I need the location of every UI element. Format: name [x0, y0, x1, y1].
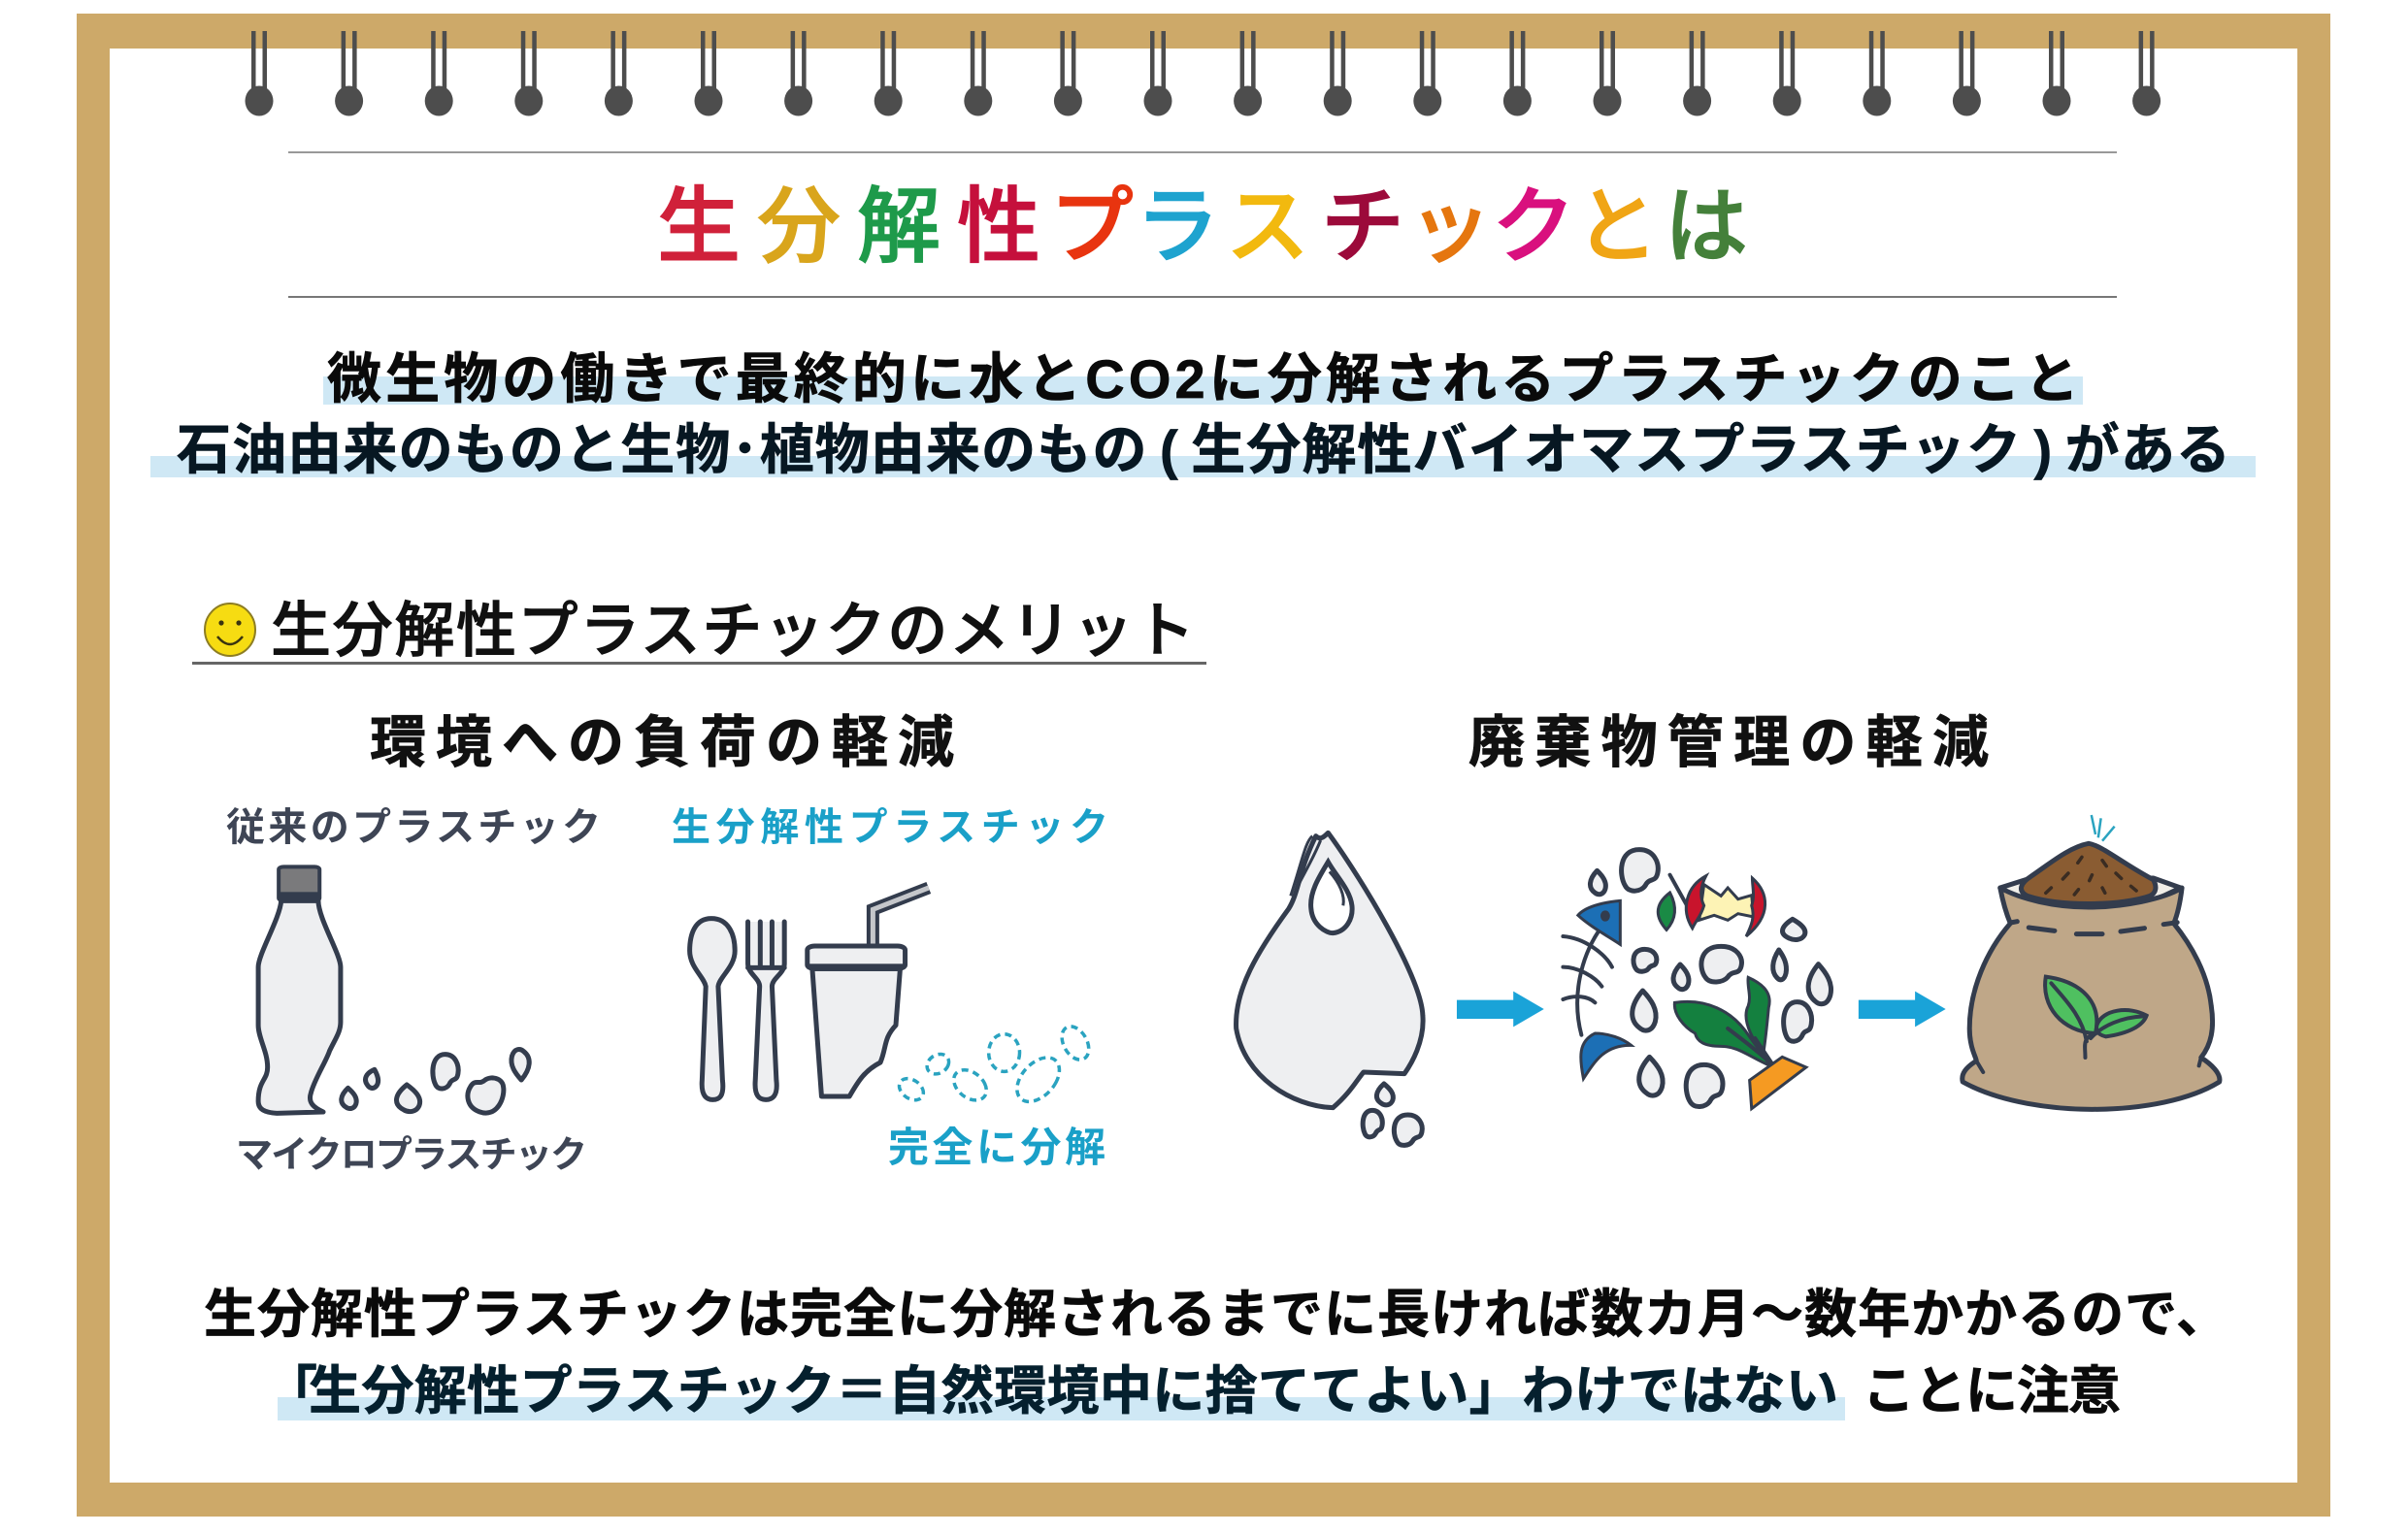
title: ッ — [1408, 180, 1492, 274]
plastic fragments — [1590, 850, 1831, 1107]
definition text block — [150, 348, 2256, 480]
decomposed fragments (dashed) — [895, 1026, 1093, 1104]
subheading: waste management: 廃棄物管理の軽減 — [1468, 711, 1989, 774]
apple core — [1658, 875, 1765, 936]
closing note — [204, 1286, 2228, 1420]
closing note: 生分解性プラスチック＝自然環境中に捨ててよい」わけではない — [309, 1362, 1838, 1420]
label: fully decomposed: 完全に分解 — [888, 1125, 1105, 1170]
label: microplastic: マイクロプラスチック — [236, 1135, 587, 1176]
label: conventional plastic: 従来のプラスチック — [226, 806, 601, 849]
icon: smiley — [205, 604, 255, 656]
subheading: environmental load: 環境への負荷の軽減 — [370, 711, 954, 774]
title: ス — [1226, 180, 1309, 274]
title: 生 — [657, 180, 741, 274]
carrot top — [1674, 977, 1806, 1109]
icon: compost sack — [1963, 815, 2220, 1109]
icon: plastic bottle — [258, 866, 341, 1113]
label: biodegradable plastic: 生分解性プラスチック — [672, 806, 1108, 849]
title: は — [1665, 180, 1748, 274]
title: ク — [1492, 180, 1575, 274]
closing note: 「 — [265, 1362, 317, 1420]
icon: spoon — [690, 919, 735, 1099]
definition text block: 石油由来のものと生物･植物由来のもの ( 生分解性バイオマスプラスチック ) がある — [177, 419, 2230, 480]
title: プ — [1050, 180, 1134, 274]
arrow — [1457, 992, 1544, 1027]
leaves — [2045, 977, 2147, 1058]
title: チ — [1321, 180, 1404, 274]
arrow — [1859, 992, 1946, 1027]
closing note: 生分解性プラスチックは完全に分解されるまでに長ければ数カ月～数年かかるので、 — [204, 1286, 2228, 1344]
fish bone — [1563, 900, 1632, 1079]
icon: organic waste — [1563, 850, 1831, 1109]
icon: plastic bag — [1237, 832, 1423, 1145]
icon: cup with straw — [808, 888, 929, 1096]
spiral binding rings — [245, 31, 2161, 116]
closing note: ことに注意 — [1863, 1362, 2121, 1420]
steam — [2092, 815, 2115, 841]
title: 解 — [857, 180, 940, 274]
section heading: merits: 生分解性プラスチックのメリット — [271, 598, 1195, 665]
microplastic fragments — [342, 1050, 529, 1118]
title: ラ — [1136, 180, 1219, 274]
title: と — [1575, 180, 1659, 274]
definition text block: 微生物の働きで最終的に水とCO2に分解されるプラスチックのこと — [327, 348, 2079, 409]
title: 分 — [757, 180, 841, 274]
icon: fork — [748, 922, 784, 1099]
title: 性 — [957, 180, 1040, 274]
